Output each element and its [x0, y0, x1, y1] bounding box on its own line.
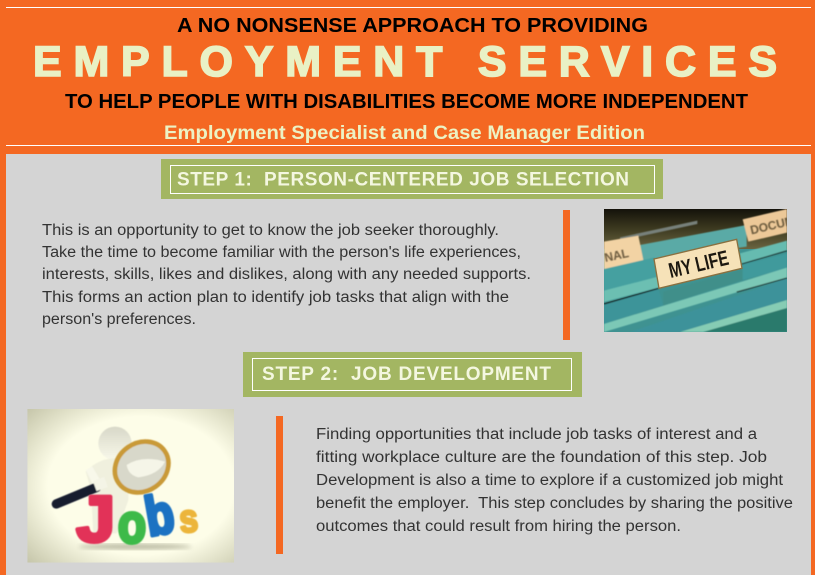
step 1 text: interests, skills, likes and dislikes, along with any needed supports. [42, 266, 531, 283]
step 2 divider bar [276, 416, 283, 554]
subtitle: TO HELP PEOPLE WITH DISABILITIES BECOME MORE INDEPENDENT [65, 91, 748, 113]
step 2 text: outcomes that could result from hiring the person. [316, 518, 681, 535]
step 1 text: person's preferences. [42, 311, 196, 328]
step 1 text: This is an opportunity to get to know the job seeker thoroughly. [42, 222, 499, 239]
step 2 text: fitting workplace culture are the foundation of this step. Job [316, 449, 767, 466]
jobs lettering: s [177, 496, 200, 542]
step 1 text: This forms an action plan to identify job tasks that align with the [42, 289, 509, 306]
header band [0, 0, 815, 154]
edition line: Employment Specialist and Case Manager Edition [164, 122, 645, 144]
title: EMPLOYMENT SERVICES [33, 38, 777, 86]
step 1 text: Take the time to become familiar with the person's life experiences, [42, 244, 521, 261]
tab label: docum: DOCUM [749, 214, 796, 238]
my life tab [654, 239, 742, 288]
jobs lettering: b [140, 482, 179, 548]
figure [86, 427, 132, 533]
step 2 banner: STEP 2: JOB DEVELOPMENT [262, 364, 551, 385]
step 2 text: Development is also a time to explore if a customized job might [316, 472, 784, 489]
step 1 text [42, 222, 531, 328]
image: jobs magnifier figure [27, 409, 234, 563]
main panel [6, 154, 811, 575]
tab label: my life: MY LIFE [666, 246, 731, 283]
step 2 text [316, 426, 793, 535]
magnifier [56, 431, 178, 504]
jobs lettering: o [118, 493, 146, 555]
step 2 banner [243, 352, 582, 397]
jobs lettering: J [76, 482, 115, 555]
step 2 text: Finding opportunities that include job tasks of interest and a [316, 426, 757, 443]
heading: intro line: A NO NONSENSE APPROACH TO PROVIDING [177, 15, 648, 37]
tab label: nal: NAL [603, 246, 630, 265]
step 2 text: benefit the employer. This step concludes by sharing the positive [316, 495, 793, 512]
step 1 divider bar [563, 210, 570, 340]
image: my life file folders [603, 209, 796, 332]
step 1 banner: STEP 1: PERSON-CENTERED JOB SELECTION [177, 170, 629, 190]
step 1 banner [161, 159, 663, 199]
jobs lettering [74, 492, 199, 546]
